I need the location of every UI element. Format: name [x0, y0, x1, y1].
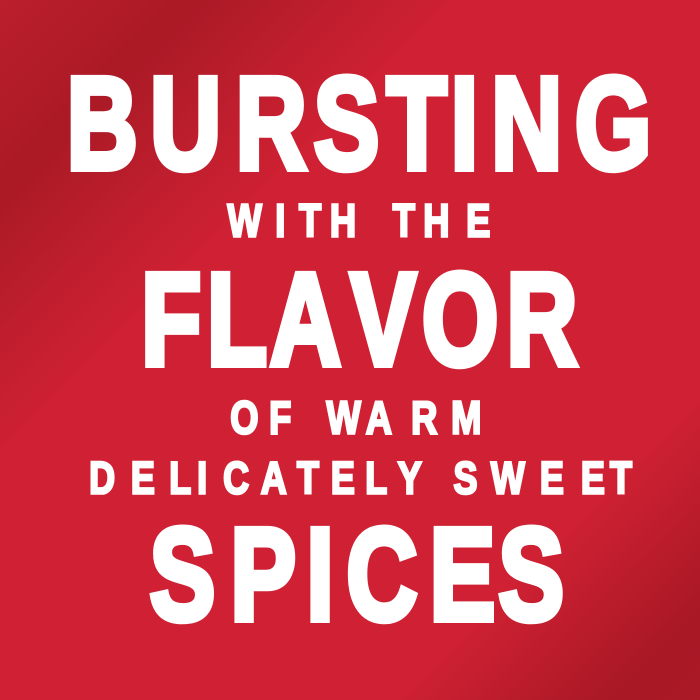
heading: SPICES: SPICES: [150, 501, 564, 648]
text: DELICATELY SWEET: DELICATELY SWEET: [89, 453, 632, 504]
heading: BURSTING: BURSTING: [67, 50, 651, 197]
text: OF WARM: OF WARM: [230, 392, 481, 444]
heading: FLAVOR: FLAVOR: [141, 246, 577, 393]
text: WITH THE: WITH THE: [228, 195, 490, 247]
